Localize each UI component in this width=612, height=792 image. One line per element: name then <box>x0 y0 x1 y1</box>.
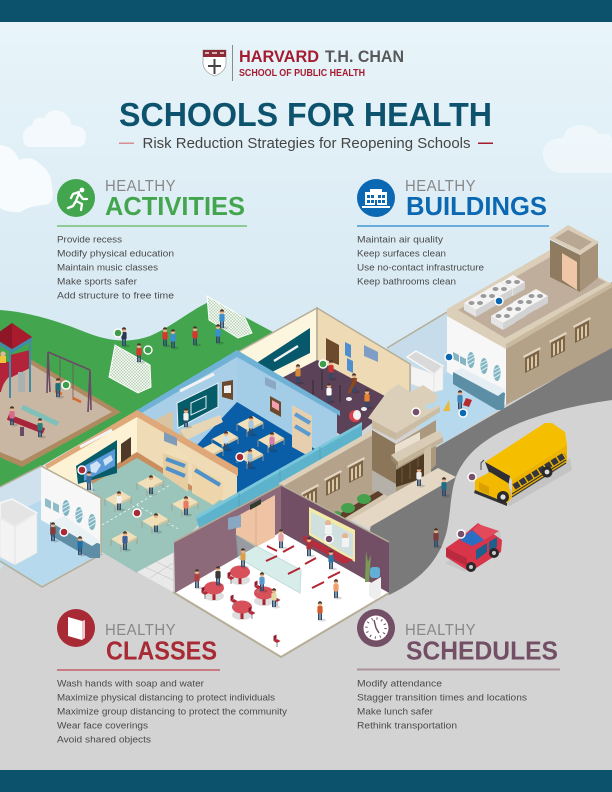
plant <box>365 551 371 582</box>
red car <box>445 523 502 572</box>
panel: healthy classes: Wash hands with soap and water <box>57 678 205 690</box>
cloud left lower <box>0 145 53 212</box>
panel: healthy classes: Wear face coverings <box>57 720 148 732</box>
players <box>121 327 130 348</box>
tower <box>368 384 443 503</box>
panel: healthy classes: CLASSES <box>106 636 217 666</box>
near goal <box>109 345 151 393</box>
icon: book <box>57 609 95 647</box>
cafeteria <box>137 485 389 657</box>
east restroom <box>387 312 506 445</box>
icon: runner <box>57 179 95 217</box>
peach classroom <box>45 410 238 573</box>
people <box>194 569 203 590</box>
main building <box>279 384 443 530</box>
panel: healthy activities: Make sports safer <box>57 276 138 288</box>
logo <box>203 45 404 81</box>
rooftop AC units <box>464 275 548 330</box>
counter <box>50 522 100 558</box>
panel: healthy classes: Avoid shared objects <box>57 734 151 746</box>
swings <box>47 352 91 412</box>
blackboard <box>177 383 218 428</box>
bookcases <box>163 447 188 462</box>
east building <box>447 225 612 405</box>
panel: healthy buildings: Keep surfaces clean <box>357 248 446 260</box>
panel: healthy buildings: Use no-contact infrastructure <box>357 262 484 274</box>
panel: healthy buildings: Maintain air quality <box>357 234 443 246</box>
music room <box>238 308 410 440</box>
stalls <box>407 351 443 374</box>
logo: HARVARD <box>239 47 319 66</box>
road <box>370 346 612 595</box>
corridor lockers <box>196 422 362 531</box>
far goal <box>207 296 252 338</box>
bottom bar <box>0 770 612 792</box>
logo: T.H. CHAN <box>325 47 404 66</box>
panel: healthy activities: HEALTHY <box>105 178 176 195</box>
people outside <box>416 467 450 548</box>
panel: healthy schedules: SCHEDULES <box>406 636 558 666</box>
subtitle: Risk Reduction Strategies for Reopening Schools <box>142 135 470 152</box>
panel: healthy buildings: HEALTHY <box>405 178 476 195</box>
light fixture <box>180 374 214 391</box>
floor distance markers <box>266 546 340 588</box>
bookcase <box>292 405 312 458</box>
soccer field <box>109 296 252 393</box>
cloud right <box>543 125 612 173</box>
panel: healthy classes: HEALTHY <box>105 622 176 639</box>
towel dispensers <box>45 498 59 513</box>
panel: healthy activities: Maintain music classes <box>57 262 158 274</box>
panel: healthy classes <box>57 609 287 746</box>
panel: healthy activities: Modify physical education <box>57 248 174 260</box>
stalls <box>0 499 37 527</box>
corkboard and posters <box>326 338 339 365</box>
water cooler <box>369 577 381 600</box>
teacher desk <box>180 415 223 440</box>
light fixture <box>80 430 112 447</box>
exit sign <box>250 499 261 510</box>
panel: healthy schedules <box>357 609 560 732</box>
school bus <box>473 423 572 506</box>
panel: healthy activities: Provide recess <box>57 234 122 246</box>
panel: healthy activities <box>57 178 247 302</box>
playground <box>0 323 121 467</box>
west restroom <box>0 466 102 587</box>
panel: healthy schedules: Modify attendance <box>357 678 442 690</box>
desks and students <box>137 475 163 496</box>
planter and sidewalk <box>333 468 456 528</box>
grass field <box>0 300 273 490</box>
mirrors <box>62 500 70 516</box>
serving window <box>309 507 355 562</box>
corkboards <box>222 380 233 400</box>
seesaws <box>8 406 58 438</box>
tables and chairs <box>230 566 250 585</box>
icon: school building <box>357 179 395 217</box>
panel: healthy schedules: Stagger transition times and locations <box>357 692 527 704</box>
blue classroom <box>137 350 340 495</box>
doors <box>236 495 275 547</box>
title: SCHOOLS FOR HEALTH <box>119 96 492 133</box>
play structure <box>0 323 32 398</box>
panel: healthy activities: Add structure to free time <box>57 290 174 302</box>
cloud left upper <box>23 110 86 147</box>
AC unit <box>265 377 276 390</box>
panel: healthy buildings: Keep bathrooms clean <box>357 276 456 288</box>
panel: healthy buildings: BUILDINGS <box>406 191 547 221</box>
icon: clock <box>357 609 395 647</box>
markers <box>60 297 503 543</box>
panel: healthy schedules: Rethink transportation <box>357 720 457 732</box>
corkboard <box>121 437 131 463</box>
panel: healthy buildings <box>357 178 549 288</box>
panel: healthy schedules: Make lunch safer <box>357 706 434 718</box>
AC unit <box>164 432 177 446</box>
panel: healthy schedules: HEALTHY <box>405 622 476 639</box>
stair house <box>549 225 599 292</box>
top bar <box>0 0 612 22</box>
glass partition <box>236 535 301 593</box>
world map board <box>76 440 117 484</box>
panel: healthy classes: Maximize physical distancing to protect individuals <box>57 692 275 704</box>
panel: healthy classes: Maximize group distancing to protect the community <box>57 706 287 718</box>
gray ground <box>0 340 612 770</box>
logo: SCHOOL OF PUBLIC HEALTH <box>239 68 365 79</box>
panel: healthy activities: ACTIVITIES <box>105 191 245 221</box>
AC unit <box>228 515 241 530</box>
